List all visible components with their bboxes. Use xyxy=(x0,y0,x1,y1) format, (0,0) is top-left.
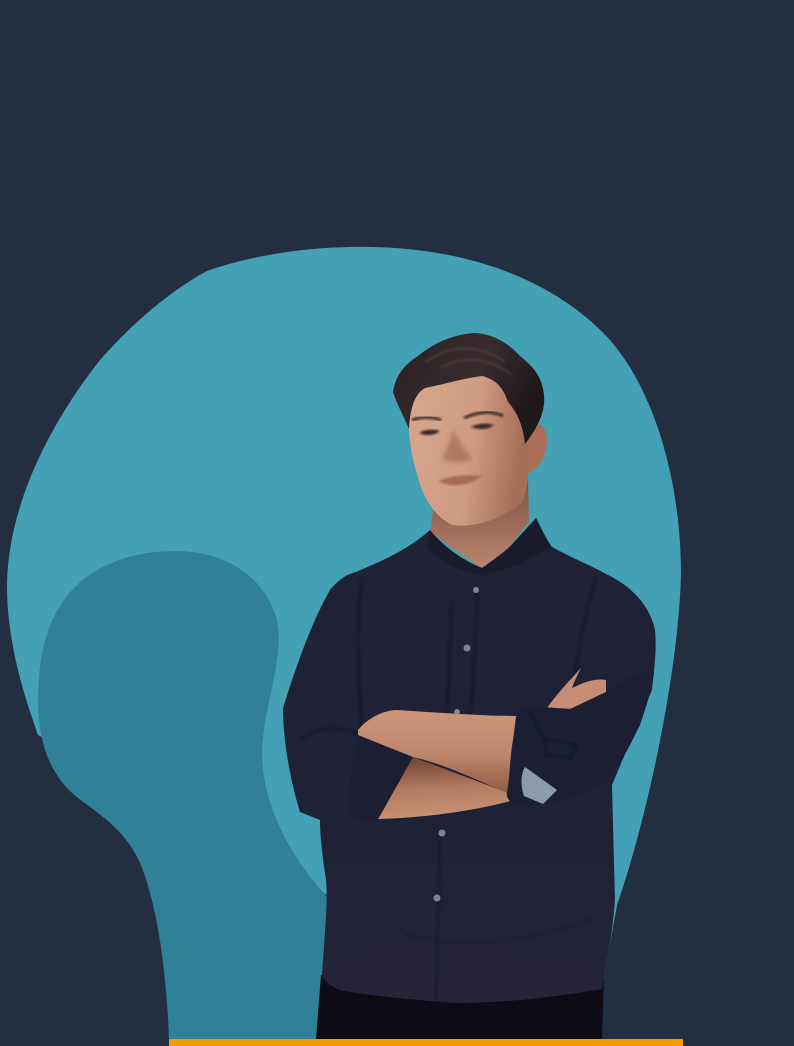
left rolled cuff xyxy=(348,735,413,823)
trousers xyxy=(316,975,604,1039)
hand xyxy=(547,668,606,709)
cuff fold xyxy=(530,712,577,758)
neck xyxy=(430,478,529,568)
person xyxy=(283,333,656,1039)
right eye xyxy=(471,424,494,429)
nose shadow xyxy=(442,432,472,462)
collar xyxy=(427,518,550,576)
shirt folds xyxy=(300,578,596,1000)
orange bar xyxy=(169,1039,683,1046)
teal blob xyxy=(7,247,681,1000)
left eye xyxy=(419,430,440,435)
upper forearm xyxy=(358,710,519,793)
shirt body xyxy=(283,518,656,1003)
ear xyxy=(528,424,547,473)
face xyxy=(409,368,529,526)
hair highlight xyxy=(425,348,512,375)
shirt buttons xyxy=(434,587,479,902)
left eyebrow xyxy=(412,417,441,420)
cuff lining xyxy=(522,767,557,804)
mouth xyxy=(438,475,482,485)
right rolled cuff and sleeve xyxy=(507,672,654,806)
darker teal blob xyxy=(38,551,335,1039)
right eyebrow xyxy=(464,412,503,418)
lower forearm xyxy=(376,757,514,819)
hair xyxy=(393,333,544,444)
